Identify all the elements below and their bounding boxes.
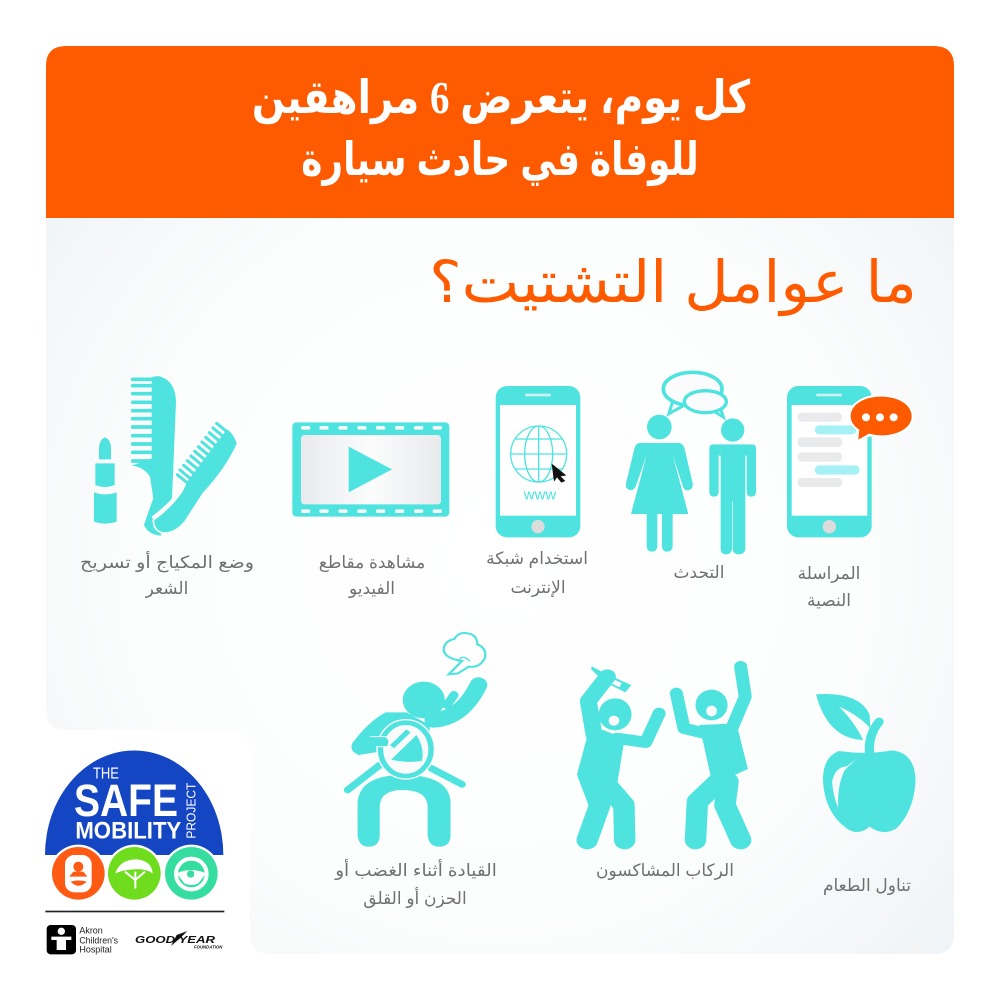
label: makeup or hair: وضع المكياج أو تسريح — [80, 551, 254, 573]
label: texting — [798, 564, 860, 610]
label: emotional driving: القيادة أثناء الغضب أو — [334, 859, 497, 881]
header band — [46, 46, 954, 218]
logo text: MOBILITY — [75, 817, 181, 844]
title — [252, 72, 750, 187]
label: watching videos — [319, 553, 425, 598]
label: talking: التحدث — [674, 563, 724, 582]
label: texting: المراسلة — [798, 564, 860, 583]
label: texting: النصية — [807, 591, 851, 610]
label: makeup or hair: الشعر — [145, 579, 188, 598]
label: watching videos: مشاهدة مقاطع — [319, 553, 425, 573]
logo: goodyear foundation: FOUNDATION — [194, 944, 223, 949]
title: للوفاة في حادث سيارة — [301, 134, 699, 187]
logo text: PROJECT — [183, 783, 198, 839]
icon: lipstick and combs — [94, 376, 238, 536]
logo dome — [45, 750, 223, 855]
heading: what are distractions: ما عوامل التشتيت؟ — [429, 249, 917, 317]
label: watching videos: الفيديو — [348, 579, 395, 598]
label: internet — [486, 549, 588, 597]
icon: phone with globe — [496, 386, 580, 537]
label: internet: استخدام شبكة — [486, 549, 588, 568]
logo text: SAFE — [74, 775, 178, 826]
icon: phone with globe: www — [523, 486, 556, 503]
label: emotional driving — [334, 859, 497, 908]
logo: akron children's hospital — [47, 925, 118, 955]
logo: akron children's hospital: Akron — [79, 925, 103, 935]
logo: akron children's hospital: Hospital — [79, 945, 112, 955]
label: eating: تناول الطعام — [823, 876, 911, 895]
icon: video film strip — [292, 422, 449, 517]
label: rowdy passengers: الركاب المشاكسون — [596, 861, 734, 880]
logo: safe mobility project — [45, 750, 224, 955]
logo text: THE — [93, 766, 119, 783]
title: كل يوم، يتعرض 6 مراهقين — [252, 72, 750, 125]
label: makeup or hair — [80, 551, 254, 598]
icon: angry driver — [348, 633, 485, 847]
icon: rowdy passengers — [577, 666, 748, 840]
logo: goodyear foundation: GOOD YEAR — [135, 935, 216, 946]
logo: akron children's hospital: Children's — [79, 935, 118, 945]
label: internet: الإنترنت — [510, 578, 566, 597]
icon: two people talking — [626, 372, 756, 554]
icon: texting phone — [787, 386, 914, 537]
logo circles — [50, 845, 220, 902]
logo: goodyear foundation — [135, 931, 223, 949]
logo divider — [45, 911, 224, 912]
icon: apple — [816, 694, 916, 832]
label: emotional driving: الحزن أو القلق — [363, 887, 467, 908]
panel: background — [46, 200, 954, 954]
logo text — [74, 766, 198, 844]
